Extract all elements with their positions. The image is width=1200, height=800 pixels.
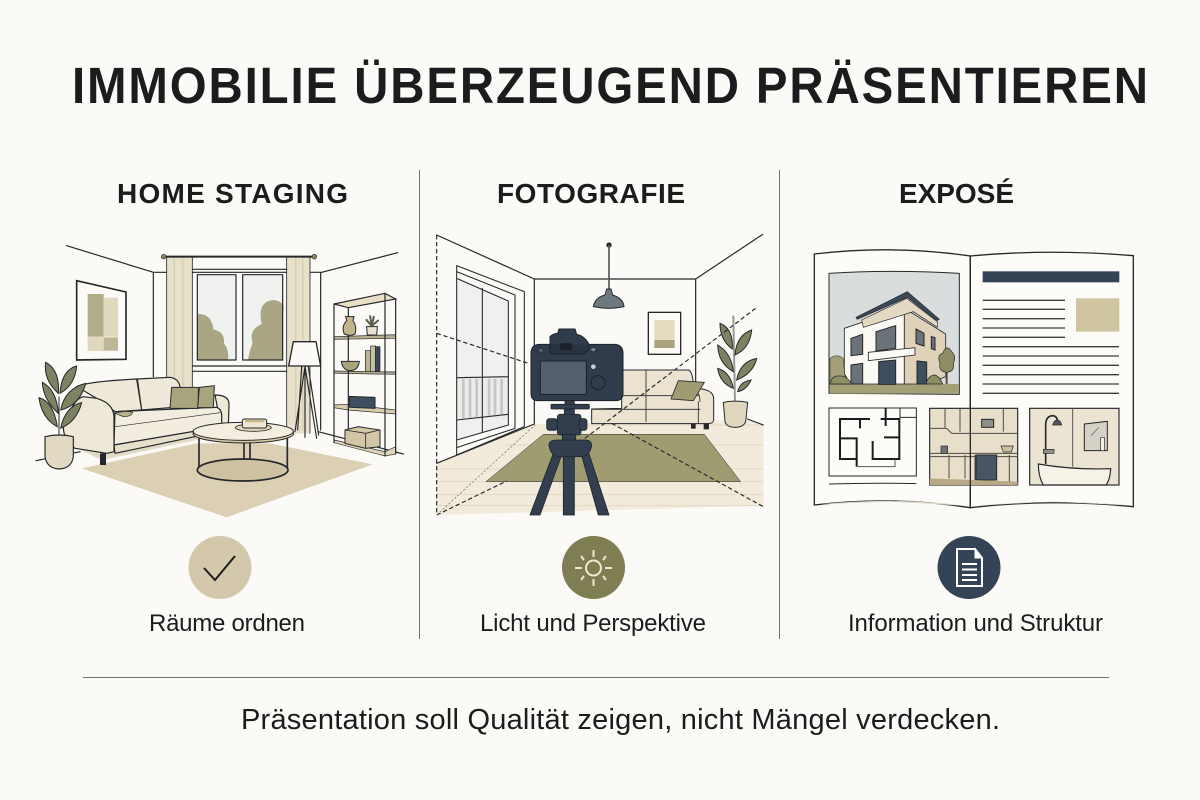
floor plan — [829, 408, 916, 484]
shelf — [334, 293, 396, 456]
title: IMMOBILIE ÜBERZEUGEND PRÄSENTIEREN — [72, 57, 1148, 114]
plant — [718, 316, 757, 427]
kitchen photo — [930, 408, 1018, 485]
window — [192, 269, 287, 371]
perspective guide lines — [437, 235, 763, 515]
heading: Home Staging: HOME STAGING — [117, 178, 348, 209]
illustration: living room — [36, 246, 403, 517]
curtains — [167, 257, 310, 433]
caption: Information und Struktur: Information und Struktur — [848, 610, 1103, 637]
sofa — [592, 370, 714, 429]
caption: Licht und Perspektive: Licht und Perspektive — [480, 610, 706, 637]
image placeholder — [1076, 298, 1119, 332]
column divider left — [419, 170, 420, 639]
rug — [82, 443, 373, 517]
illustration: camera in room — [437, 234, 763, 515]
caption: Räume ordnen: Räume ordnen — [149, 610, 305, 637]
book spine — [968, 256, 972, 508]
column divider right — [779, 170, 780, 639]
framed picture — [77, 281, 126, 360]
icon: sun badge — [562, 536, 625, 599]
floor boards — [437, 425, 763, 506]
text lines — [983, 300, 1119, 393]
bathroom photo — [1030, 408, 1119, 485]
heading: Exposé: EXPOSÉ — [899, 178, 1014, 209]
house photo — [829, 271, 959, 394]
icon: check badge — [188, 536, 252, 599]
sofa — [63, 377, 229, 465]
camera — [531, 329, 623, 401]
floor — [437, 420, 763, 515]
headline bar — [983, 271, 1119, 282]
wall picture — [648, 312, 681, 354]
floor lamp — [289, 342, 321, 438]
coffee table — [193, 419, 294, 481]
plant — [39, 362, 86, 469]
balcony door — [457, 266, 524, 455]
illustration: exposé brochure — [814, 250, 1133, 508]
curtain rod — [161, 254, 317, 259]
tripod — [530, 400, 609, 515]
open book pages — [814, 250, 1133, 508]
pendant lamp — [593, 242, 624, 308]
rug — [486, 434, 741, 482]
heading: Fotografie: FOTOGRAFIE — [497, 178, 685, 209]
footer divider — [83, 677, 1109, 678]
icon: document badge — [938, 536, 1000, 599]
room walls and floor lines — [36, 246, 403, 461]
room lines — [437, 234, 763, 463]
footer statement: Präsentation soll Qualität zeigen, nicht Mängel verdecken. — [241, 704, 1000, 736]
